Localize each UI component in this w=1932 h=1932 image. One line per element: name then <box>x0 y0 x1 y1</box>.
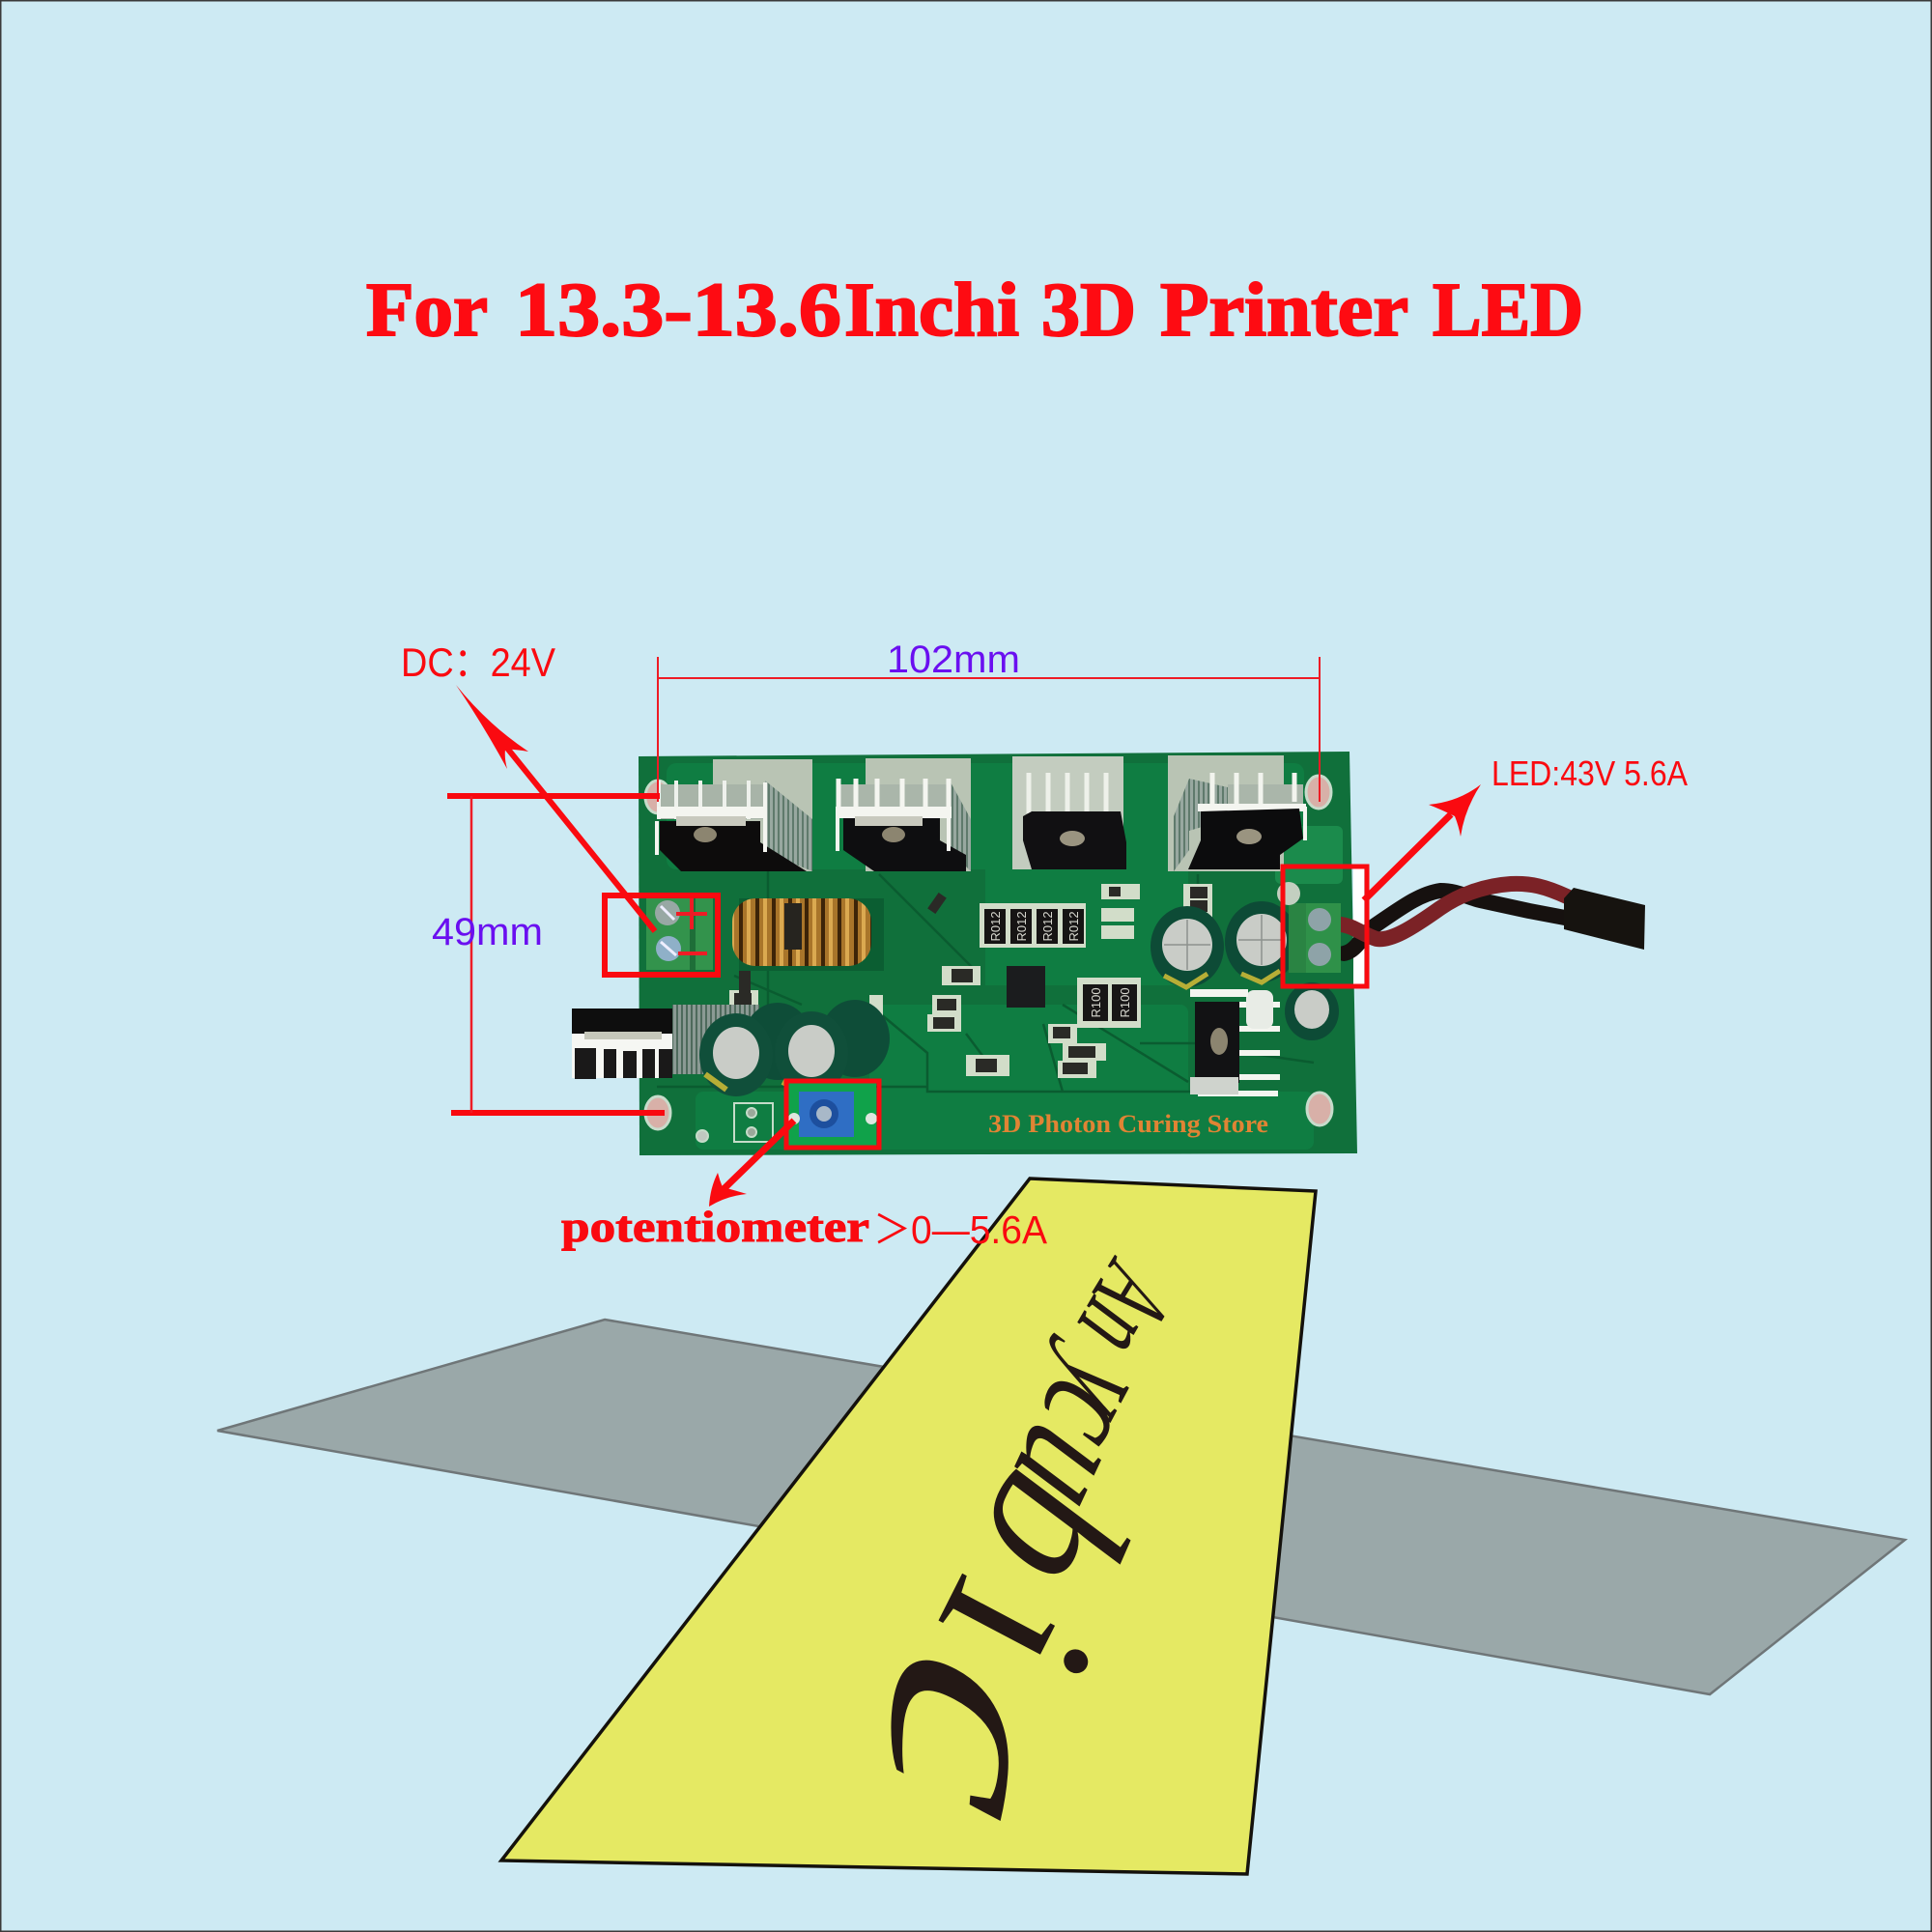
resistors R100: R100 <box>1118 987 1132 1018</box>
label: LED output: LED:43V 5.6A <box>1492 753 1688 793</box>
panel: yellow Anycubic sheet <box>501 1179 1316 1891</box>
heatsink 3 <box>1012 756 1126 869</box>
small SMD parts <box>729 884 1212 1078</box>
PCB traces <box>657 869 1314 1092</box>
dimension: 49mm height <box>432 796 665 1113</box>
title: Inchi <box>844 269 1019 353</box>
dimension: 102mm width <box>658 639 1320 802</box>
title: LED <box>1433 269 1583 353</box>
102mm label: 102mm <box>887 639 1020 681</box>
current sense resistors R012: R012 <box>988 911 1003 942</box>
output screw terminal <box>1277 882 1341 973</box>
grey build plate shape <box>217 1320 1905 1694</box>
arrow: LED output <box>1364 784 1481 900</box>
black wire <box>1344 891 1565 953</box>
PCB base <box>639 752 1357 1155</box>
red wire <box>1341 884 1567 939</box>
title: 13.3-13.6 <box>515 269 841 353</box>
store name silkscreen: 3D Photon Curing Store <box>988 1110 1268 1138</box>
mounting holes <box>645 776 1332 1129</box>
brand text: Anycubic in perspective: n <box>1055 1276 1180 1387</box>
brand text: Anycubic in perspective: A <box>1071 1238 1196 1355</box>
heatsink 2 <box>836 758 971 871</box>
potentiometer <box>787 1082 877 1146</box>
current sense resistors R012 <box>980 903 1086 948</box>
input capacitors <box>699 1000 890 1096</box>
input screw terminal <box>646 896 713 970</box>
label: potentiometer range: potentiometer <box>561 1202 869 1251</box>
brand text: Anycubic in perspective: c <box>837 1599 1116 1891</box>
arrow: potentiometer <box>709 1121 794 1207</box>
current sense resistors R012: R012 <box>1066 911 1081 942</box>
brand text: Anycubic in perspective <box>837 1238 1196 1891</box>
LED output highlight box <box>1283 867 1367 986</box>
brand text: Anycubic in perspective: c <box>1013 1348 1170 1490</box>
resistors R100: R100 <box>1089 987 1103 1018</box>
title <box>366 269 1583 353</box>
inductor coil <box>732 898 884 971</box>
current sense resistors R012: R012 <box>1014 911 1029 942</box>
controller IC <box>1007 966 1045 1008</box>
input heatsink sticking out <box>572 1005 759 1079</box>
title: 3D <box>1041 269 1136 353</box>
49mm label: 49mm <box>432 911 543 953</box>
arrow: DC input <box>456 685 655 931</box>
panel: LED driver circuit board <box>572 752 1364 1155</box>
PCB lighter copper zones <box>667 763 1343 1150</box>
resistors R100 <box>1077 978 1141 1028</box>
current sense resistors R012: R012 <box>1040 911 1055 942</box>
title: Printer <box>1160 269 1408 353</box>
brand text: Anycubic in perspective: b <box>945 1428 1162 1646</box>
input highlight box <box>605 895 718 975</box>
potentiometer highlight box <box>786 1081 879 1148</box>
heatsink 4 <box>1168 755 1307 871</box>
small input connector footprint <box>696 1103 773 1142</box>
Q3 heatsink <box>1190 989 1280 1094</box>
label: potentiometer range <box>561 1202 1048 1252</box>
brand text: Anycubic in perspective: u <box>983 1389 1159 1558</box>
label: DC input voltage: DC：24V <box>401 639 555 685</box>
brand text: Anycubic in perspective: i <box>892 1546 1147 1720</box>
title: For <box>366 269 488 353</box>
label: potentiometer range: ＞0—5.6A <box>873 1208 1048 1252</box>
heatsink 1 <box>655 759 812 871</box>
brand text: Anycubic in perspective: y <box>1035 1330 1179 1460</box>
heat shrink sleeve <box>1564 888 1645 950</box>
LED cable <box>1341 884 1645 953</box>
output small capacitor <box>1285 982 1339 1040</box>
polarity plus and minus marks <box>676 898 707 953</box>
output capacitors <box>1151 901 1298 987</box>
output screw terminal strip <box>1353 867 1364 985</box>
